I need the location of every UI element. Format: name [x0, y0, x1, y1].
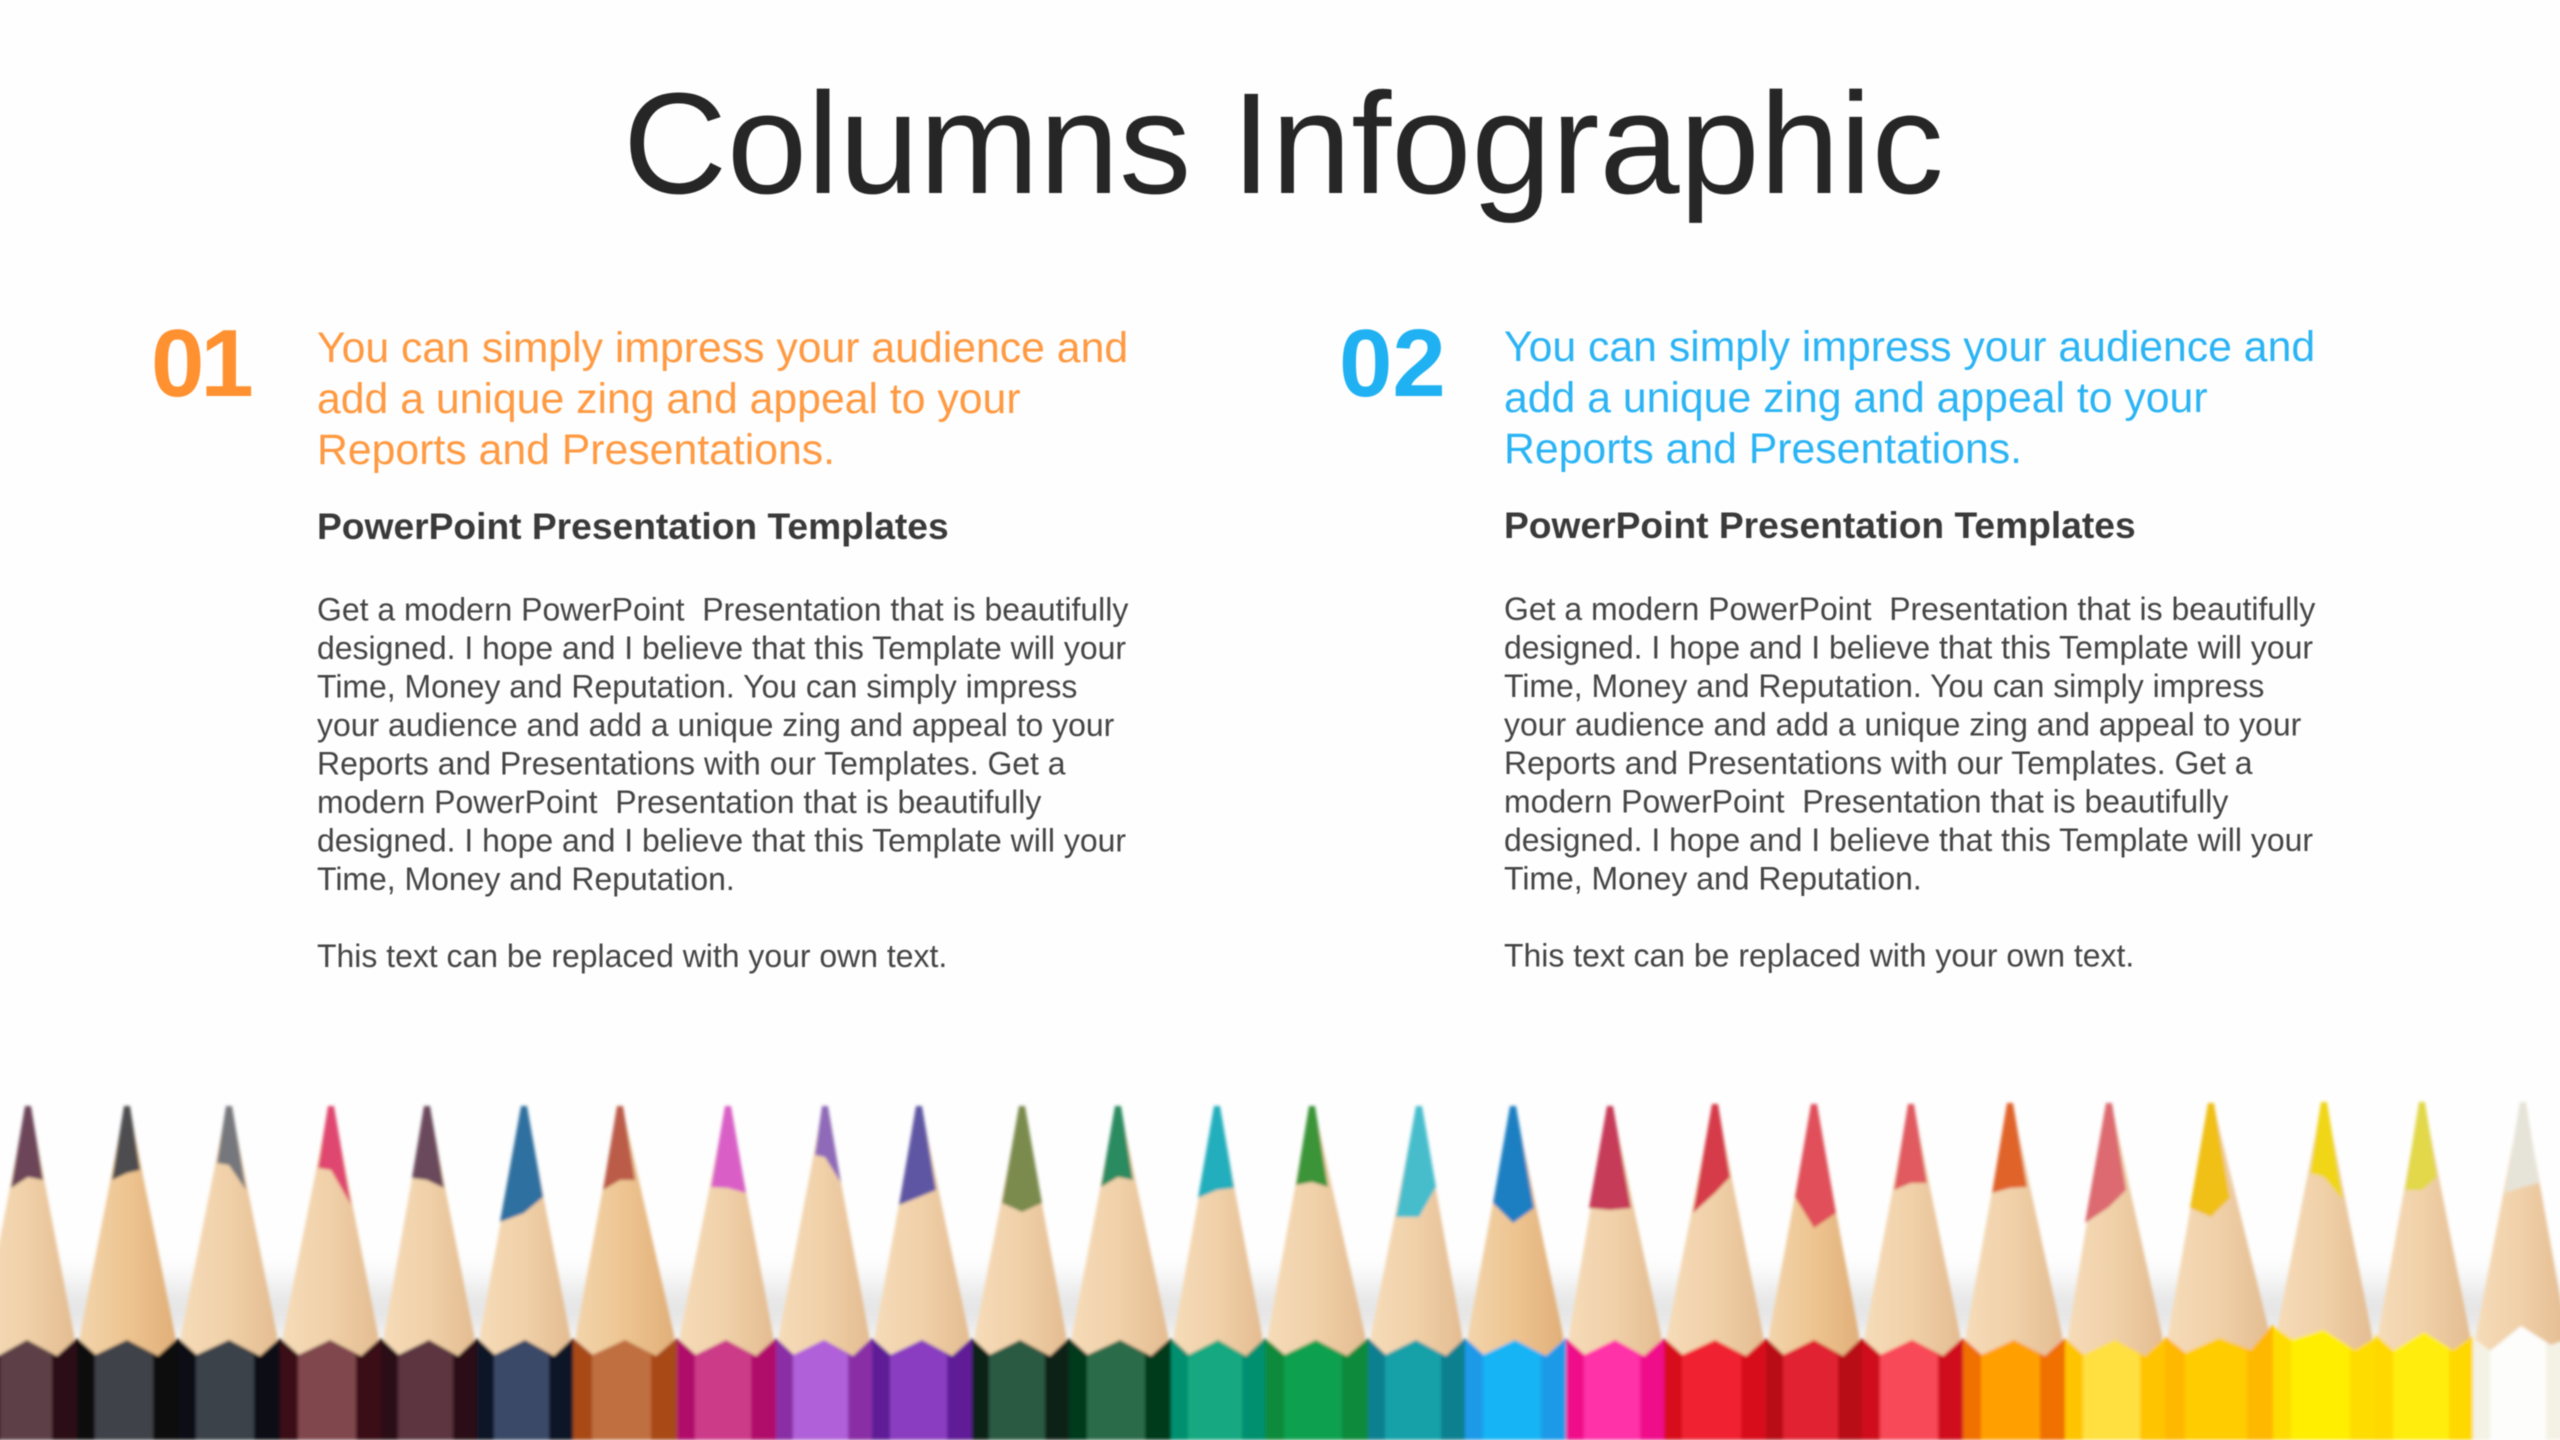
pencil: grey: [178, 1106, 280, 1440]
headline 02: Reports and Presentations.: [1504, 425, 2022, 473]
body text 02: designed. I hope and I believe that this Template will your: [1504, 630, 2313, 666]
pencil: rose: [280, 1106, 381, 1440]
body text 02: Time, Money and Reputation. You can simply impress: [1504, 668, 2264, 704]
body text 02: designed. I hope and I believe that this Template will your: [1504, 822, 2313, 858]
body text 01: Time, Money and Reputation.: [317, 861, 735, 897]
body text 01: Reports and Presentations with our Templates. Get a: [317, 746, 1066, 782]
number 01: 01: [151, 310, 251, 417]
body text 01: [317, 592, 1128, 974]
body text 01: This text can be replaced with your own text.: [317, 938, 947, 974]
body text 01: Time, Money and Reputation. You can simply impress: [317, 668, 1077, 704]
pencil shadow: [0, 1285, 2560, 1335]
body text 02: Time, Money and Reputation.: [1504, 860, 1922, 896]
number 02: 02: [1339, 310, 1446, 417]
pencil: yellow: [2273, 1102, 2375, 1440]
pencil: emerald: [1171, 1106, 1265, 1440]
pencil: bright yellow: [2375, 1102, 2473, 1440]
pencil: orange: [1963, 1103, 2065, 1440]
pencil: sky blue: [1465, 1106, 1566, 1440]
panel: column 01: [151, 310, 1128, 974]
pencil: violet: [776, 1106, 872, 1440]
body text 01: your audience and add a unique zing and appeal to your: [317, 707, 1115, 743]
headline 02: You can simply impress your audience and: [1504, 323, 2315, 371]
body text 01: designed. I hope and I believe that this Template will your: [317, 822, 1126, 858]
pencil: purple: [872, 1106, 972, 1440]
pencil: plum: [0, 1106, 77, 1440]
body text 02: Reports and Presentations with our Templates. Get a: [1504, 745, 2253, 781]
pencil: hot pink: [1566, 1106, 1664, 1440]
panel: column 02: [1339, 310, 2315, 974]
pencil: olive: [972, 1106, 1069, 1440]
pencil: lemon: [2065, 1103, 2165, 1440]
pencil: red: [1664, 1104, 1766, 1440]
subheading 02: PowerPoint Presentation Templates: [1504, 504, 2136, 546]
pencil: gold: [2165, 1103, 2273, 1440]
subheading 01: PowerPoint Presentation Templates: [317, 505, 949, 547]
body text 02: Get a modern PowerPoint Presentation that is beautifully: [1504, 591, 2315, 627]
body text 01: modern PowerPoint Presentation that is beautifully: [317, 784, 1041, 820]
headline 02: [1504, 323, 2315, 473]
pencil: magenta: [677, 1106, 776, 1440]
pencil: scarlet: [1862, 1104, 1963, 1440]
body text 01: Get a modern PowerPoint Presentation that is beautifully: [317, 592, 1128, 628]
body text 02: your audience and add a unique zing and appeal to your: [1504, 706, 2302, 742]
headline 01: add a unique zing and appeal to your: [317, 375, 1021, 423]
body text 02: This text can be replaced with your own text.: [1504, 938, 2134, 974]
body text 01: designed. I hope and I believe that this Template will your: [317, 630, 1126, 666]
pencil: crimson: [1766, 1104, 1862, 1440]
title: Columns Infographic: [623, 63, 1944, 224]
headline 02: add a unique zing and appeal to your: [1504, 374, 2208, 422]
headline 01: You can simply impress your audience and: [317, 324, 1128, 372]
body text 02: [1504, 591, 2315, 974]
pencil: navy: [477, 1106, 573, 1440]
body text 02: modern PowerPoint Presentation that is beautifully: [1504, 784, 2228, 820]
pencil: forest green: [1069, 1106, 1171, 1440]
headline 01: Reports and Presentations.: [317, 426, 835, 474]
pencil: white: [2473, 1102, 2560, 1440]
pencil: mauve: [381, 1106, 477, 1440]
pencil: sienna: [573, 1106, 677, 1440]
headline 01: [317, 324, 1128, 474]
pencil row: [0, 1102, 2560, 1440]
pencil: green: [1265, 1106, 1368, 1440]
pencil: charcoal: [77, 1106, 178, 1440]
pencil: teal: [1368, 1106, 1465, 1440]
